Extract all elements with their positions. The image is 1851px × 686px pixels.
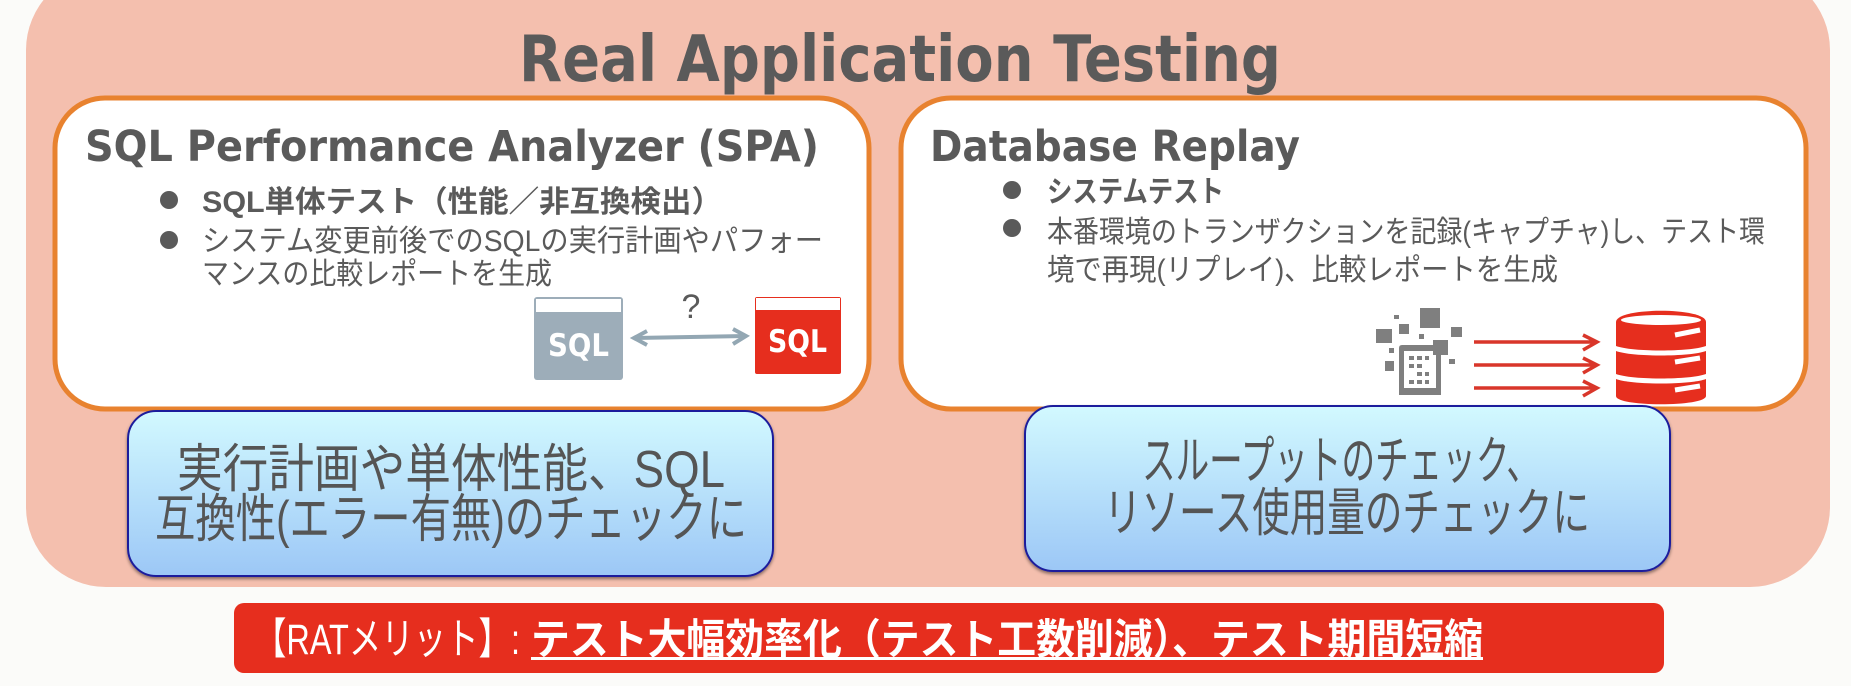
bullet: SQL single test: SQL単体テスト（性能／非互換検出） — [202, 186, 722, 219]
icon: tablet with data fragments — [1376, 308, 1462, 395]
bullet: replay description — [1003, 216, 1765, 287]
bullet: SPA description: マンスの比較レポートを生成 — [202, 258, 552, 291]
bullet: SPA description: システム変更前後でのSQLの実行計画やパフォー — [202, 225, 823, 258]
panel: Database Replay — [901, 98, 1806, 409]
icon: three arrows — [1474, 335, 1597, 396]
banner: RAT merit — [234, 603, 1664, 673]
panel: SQL Performance Analyzer — [55, 98, 869, 409]
callout: Database Replay use: リソース使用量のチェックに — [1104, 485, 1590, 543]
icon: grey SQL window — [534, 297, 623, 380]
icon: red database — [1616, 311, 1706, 404]
callout: SPA use — [128, 411, 773, 576]
icon: grey SQL window: SQL — [548, 328, 609, 364]
icon: red SQL window: SQL — [768, 324, 827, 360]
callout: SPA use: 互換性(エラー有無)のチェックに — [155, 491, 747, 549]
bullet: system test — [1003, 176, 1224, 209]
bullet: replay description: 境で再現(リプレイ)、比較レポートを生成 — [1047, 254, 1558, 287]
icon: red SQL window — [755, 297, 841, 374]
callout: Database Replay use — [1025, 406, 1670, 571]
heading: SPA: SQL Performance Analyzer (SPA) — [85, 122, 819, 172]
question mark: ? — [682, 288, 700, 326]
banner: RAT merit: 【RATメリット】: — [254, 616, 520, 664]
bullet: SPA description — [160, 225, 823, 291]
callout: Database Replay use: スループットのチェック、 — [1142, 433, 1540, 491]
icon: comparison arrow — [634, 329, 746, 345]
banner: RAT merit: テスト大幅効率化（テスト工数削減）、テスト期間短縮 — [531, 616, 1483, 663]
callout: SPA use: 実行計画や単体性能、SQL — [177, 441, 725, 499]
title: Real Application Testing — [519, 23, 1281, 97]
bullet: system test: システムテスト — [1047, 176, 1224, 209]
heading: Database Replay: Database Replay — [930, 122, 1300, 172]
